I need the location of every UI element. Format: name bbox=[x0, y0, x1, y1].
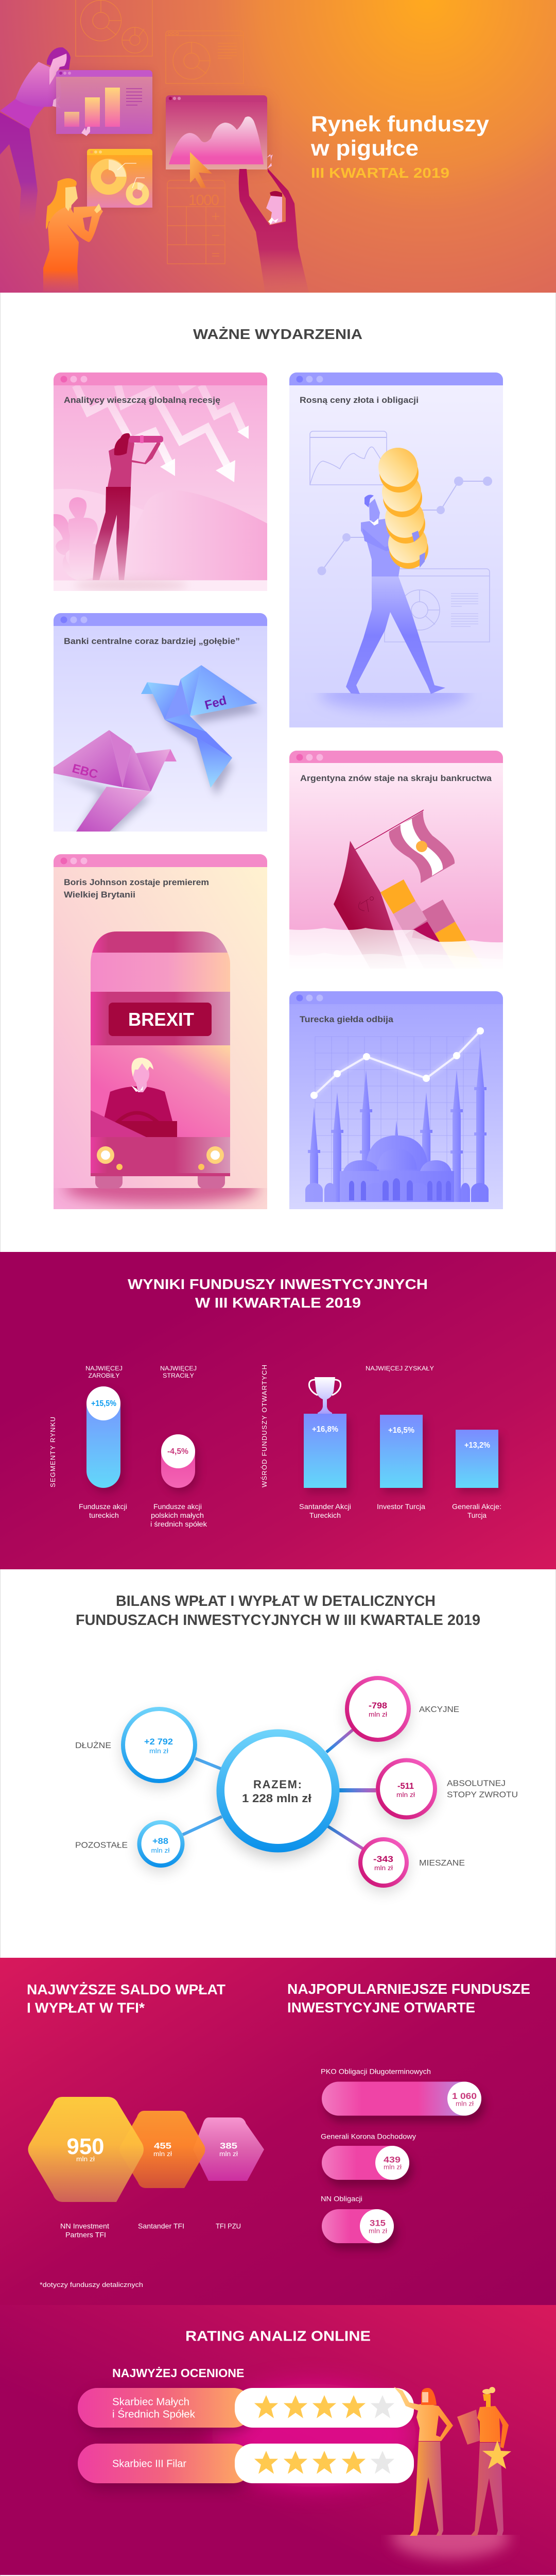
panel: turecka giełda bbox=[289, 991, 503, 1209]
fund label: Generali: Generali Korona Dochodowy bbox=[321, 2132, 416, 2140]
rating row: skarbiec III filar bbox=[78, 2444, 414, 2488]
pill: Generali: mln zł bbox=[384, 2163, 402, 2171]
hexagon: tfi pzu: mln zł bbox=[219, 2150, 238, 2158]
column label: najwięcej straciły: STRACIŁY bbox=[163, 1372, 194, 1379]
illustration: falling arrows and telescope woman bbox=[54, 385, 267, 591]
pink window with area chart bbox=[166, 95, 267, 170]
man with star bbox=[457, 2387, 511, 2536]
bubble: pozostałe: mln zł bbox=[151, 1846, 170, 1854]
bubble: dłużne bbox=[121, 1707, 197, 1788]
panel: argentyna bbox=[289, 751, 503, 969]
man's hands bbox=[412, 531, 425, 568]
double decker bus bbox=[91, 931, 230, 1189]
bubble labels: POZOSTAŁE bbox=[75, 1841, 128, 1850]
panel: banki centralne bbox=[54, 613, 267, 837]
pill: fundusze akcji polskich: -4,5% bbox=[167, 1447, 188, 1456]
bar: generali: +13,2% bbox=[464, 1441, 490, 1450]
bubble: akcyjne: -798 bbox=[369, 1701, 387, 1710]
bubble: razem bbox=[216, 1729, 340, 1859]
heading: RATING ANALIZ ONLINE bbox=[185, 2328, 371, 2344]
bubble: mieszane: mln zł bbox=[374, 1864, 393, 1872]
card title bbox=[64, 877, 209, 900]
bubble labels: STOPY ZWROTU bbox=[447, 1791, 518, 1799]
heading: najpopularniejsze: NAJPOPULARNIEJSZE FUNDUSZE bbox=[287, 1981, 530, 1997]
pill: NN bbox=[322, 2209, 397, 2250]
mosque bbox=[305, 1047, 489, 1202]
sinking ship with flag bbox=[289, 810, 503, 969]
bubble: dłużne: +2 792 bbox=[144, 1737, 173, 1747]
column label: najwięcej zarobiły: ZAROBIŁY bbox=[89, 1372, 119, 1379]
origami birds: EBC bbox=[71, 761, 99, 782]
bubble: akcyjne: mln zł bbox=[369, 1710, 387, 1718]
hexagon labels: TFI PZU bbox=[216, 2222, 241, 2230]
rating row: skarbiec małych: Skarbiec Małych bbox=[112, 2397, 189, 2408]
column label: najwięcej straciły: NAJWIĘCEJ bbox=[160, 1365, 197, 1372]
hexagon: santander: mln zł bbox=[153, 2150, 172, 2158]
bubble: absolutnej stopy zwrotu: -511 bbox=[397, 1781, 414, 1791]
walking man bbox=[346, 495, 445, 694]
panel: saldo wpłat i popularne fundusze bbox=[0, 1958, 556, 2305]
shadow bbox=[58, 1188, 267, 1209]
column label: najwięcej zarobiły: NAJWIĘCEJ bbox=[85, 1365, 123, 1372]
people ground bbox=[386, 2535, 515, 2566]
card title: Rosną ceny złota i obligacji bbox=[300, 395, 419, 405]
pill: fundusze akcji tureckich: +15,5% bbox=[91, 1399, 116, 1408]
labels under bars: polskich małych bbox=[151, 1511, 204, 1519]
hexagon labels: NN Investment bbox=[60, 2222, 109, 2230]
pill: Generali: 439 bbox=[384, 2155, 401, 2165]
fund label: PKO: PKO Obligacji Długoterminowych bbox=[321, 2067, 431, 2075]
hexagon: nn investment: 950 bbox=[67, 2134, 104, 2159]
heading: najwyższe saldo: NAJWYŻSZE SALDO WPŁAT bbox=[27, 1981, 225, 1997]
hexagon: santander bbox=[119, 2111, 205, 2188]
brexit sign: BREXIT bbox=[128, 1009, 194, 1030]
stars bbox=[254, 2451, 394, 2474]
card title: Turecka giełda odbija bbox=[300, 1014, 394, 1024]
trophy bbox=[309, 1377, 341, 1414]
outline calculator: 1000 bbox=[188, 192, 219, 209]
column label: najwięcej zyskały: NAJWIĘCEJ ZYSKAŁY bbox=[366, 1365, 434, 1372]
column label: najwięcej zarobiły bbox=[85, 1365, 123, 1379]
rating row: skarbiec małych: i Średnich Spółek bbox=[112, 2408, 196, 2420]
hexagon: tfi pzu bbox=[193, 2117, 264, 2181]
bubble: akcyjne bbox=[345, 1676, 411, 1747]
axis label: segmenty rynku: SEGMENTY RYNKU bbox=[49, 1417, 57, 1487]
bubble: absolutnej stopy zwrotu: mln zł bbox=[396, 1791, 415, 1799]
background charts bbox=[310, 431, 490, 642]
glow behind rows bbox=[211, 2384, 417, 2487]
rating row: skarbiec małych bbox=[78, 2388, 414, 2433]
labels under bars: Generali Akcje: bbox=[452, 1502, 501, 1511]
bubble chart bbox=[75, 1676, 518, 1892]
card title: Wielkiej Brytanii bbox=[64, 890, 135, 900]
heading bbox=[128, 1276, 428, 1311]
card title: Analitycy wieszczą globalną recesję bbox=[64, 395, 220, 405]
bubble: razem: RAZEM: bbox=[253, 1778, 302, 1791]
bubble: absolutnej stopy zwrotu bbox=[376, 1758, 437, 1824]
heading: najwyższe saldo: I WYPŁAT W TFI* bbox=[27, 2000, 145, 2015]
hexagon labels bbox=[60, 2222, 241, 2239]
pill: NN: mln zł bbox=[369, 2227, 387, 2235]
bar: investor: +16,5% bbox=[388, 1426, 414, 1435]
outline calculator bbox=[167, 180, 225, 264]
card title: Banki centralne coraz bardziej „gołębie” bbox=[64, 636, 240, 646]
pill: PKO bbox=[322, 2081, 485, 2123]
bar: generali bbox=[456, 1430, 501, 1493]
bubble: mieszane bbox=[358, 1837, 409, 1892]
labels under bars: Santander Akcji bbox=[299, 1502, 351, 1511]
bar: investor bbox=[380, 1415, 426, 1493]
origami birds bbox=[54, 665, 260, 837]
connectors bbox=[183, 1730, 376, 1849]
heading: WYNIKI FUNDUSZY INWESTYCYJNYCH bbox=[128, 1276, 428, 1292]
outline donut window bbox=[76, 0, 152, 56]
labels under bars: tureckich bbox=[89, 1511, 119, 1519]
pill: fundusze akcji polskich bbox=[161, 1434, 198, 1493]
purple window with bar chart bbox=[56, 70, 152, 136]
labels under bars: Investor Turcja bbox=[377, 1502, 425, 1511]
labels under bars: Fundusze akcji bbox=[79, 1502, 127, 1511]
hero banner bbox=[0, 0, 556, 293]
crimson man bbox=[239, 154, 309, 293]
purple woman bbox=[0, 47, 71, 228]
hexagon labels: Partners TFI bbox=[65, 2231, 106, 2239]
heading: ważne wydarzenia: WAŻNE WYDARZENIA bbox=[193, 326, 362, 342]
heading: bilans wpłat bbox=[76, 1593, 480, 1629]
pill: PKO: mln zł bbox=[456, 2100, 474, 2107]
orange woman bbox=[43, 178, 103, 292]
panel: boris johnson bbox=[54, 854, 267, 1209]
cursor bbox=[190, 152, 212, 188]
labels under bars: Fundusze akcji bbox=[153, 1502, 202, 1511]
title: w pigułce bbox=[310, 136, 419, 161]
bubble: pozostałe: +88 bbox=[152, 1836, 168, 1846]
hexagon: nn investment: mln zł bbox=[76, 2155, 95, 2163]
outline window with donut bbox=[166, 31, 244, 83]
footnote: *dotyczy funduszy detalicznych bbox=[40, 2281, 143, 2289]
bubble: mieszane: -343 bbox=[373, 1854, 393, 1864]
panel: rating analiz online bbox=[0, 2305, 556, 2575]
orange window with donuts bbox=[87, 149, 152, 208]
card title: Boris Johnson zostaje premierem bbox=[64, 877, 209, 887]
bubble labels: ABSOLUTNEJ bbox=[447, 1780, 506, 1788]
hexagon labels: Santander TFI bbox=[138, 2222, 184, 2230]
bubble: pozostałe bbox=[137, 1820, 184, 1872]
subtitle: III KWARTAŁ 2019 bbox=[311, 165, 449, 181]
title bbox=[310, 112, 489, 161]
title: Rynek funduszy bbox=[311, 112, 489, 137]
card title: Argentyna znów staje na skraju bankructwa bbox=[300, 773, 492, 783]
bubble labels bbox=[75, 1705, 518, 1868]
axis label: wśród funduszy otwartych: WŚRÓD FUNDUSZY OTWARTYCH bbox=[260, 1365, 268, 1487]
bubble: razem: 1 228 mln zł bbox=[242, 1792, 311, 1805]
labels under bars bbox=[79, 1502, 501, 1528]
hexagon: santander: 455 bbox=[154, 2141, 171, 2150]
gold coins bbox=[378, 448, 428, 569]
heading: najwyższe saldo bbox=[27, 1981, 225, 2015]
pill: NN: 315 bbox=[370, 2218, 386, 2228]
hexagon: nn investment bbox=[28, 2097, 144, 2202]
fund label: NN: NN Obligacji bbox=[321, 2195, 362, 2203]
bubble labels: MIESZANE bbox=[419, 1859, 465, 1868]
woman pointing bbox=[394, 2387, 453, 2536]
stars bbox=[254, 2395, 394, 2418]
heading: najpopularniejsze bbox=[287, 1981, 530, 2015]
hexagon: tfi pzu: 385 bbox=[220, 2141, 237, 2150]
pill: PKO: 1 060 bbox=[452, 2091, 477, 2101]
pill: Generali bbox=[322, 2146, 413, 2187]
labels under bars: Turcja bbox=[467, 1511, 486, 1519]
heading: W III KWARTALE 2019 bbox=[195, 1295, 361, 1311]
bar: santander bbox=[304, 1414, 350, 1493]
column label: najwięcej straciły bbox=[160, 1365, 197, 1379]
origami birds: Fed bbox=[203, 693, 228, 713]
panel: wyniki funduszy bbox=[0, 1252, 556, 1569]
bubble: dłużne: mln zł bbox=[149, 1747, 168, 1755]
grid bbox=[315, 1037, 480, 1185]
heading: najpopularniejsze: INWESTYCYJNE OTWARTE bbox=[287, 1999, 475, 2015]
panel: ceny złota bbox=[289, 372, 503, 727]
heading: bilans wpłat: BILANS WPŁAT I WYPŁAT W DETALICZNYCH bbox=[116, 1593, 436, 1609]
shadow bbox=[318, 693, 470, 715]
mosque windows bbox=[349, 1178, 451, 1200]
bubble labels: DŁUŻNE bbox=[75, 1740, 111, 1750]
labels under bars: Tureckich bbox=[309, 1511, 341, 1519]
line chart bbox=[310, 1027, 484, 1099]
rating row: skarbiec III filar: Skarbiec III Filar bbox=[112, 2459, 186, 2470]
bar: santander: +16,8% bbox=[312, 1425, 338, 1434]
panel: analitycy recesja bbox=[54, 372, 267, 591]
labels under bars: i średnich spółek bbox=[150, 1520, 207, 1528]
pill: fundusze akcji tureckich bbox=[86, 1386, 124, 1493]
heading: bilans wpłat: FUNDUSZACH INWESTYCYJNYCH W III KWARTALE 2019 bbox=[76, 1612, 480, 1629]
subheading: NAJWYŻEJ OCENIONE bbox=[112, 2366, 244, 2380]
bubble labels: AKCYJNE bbox=[419, 1705, 459, 1714]
